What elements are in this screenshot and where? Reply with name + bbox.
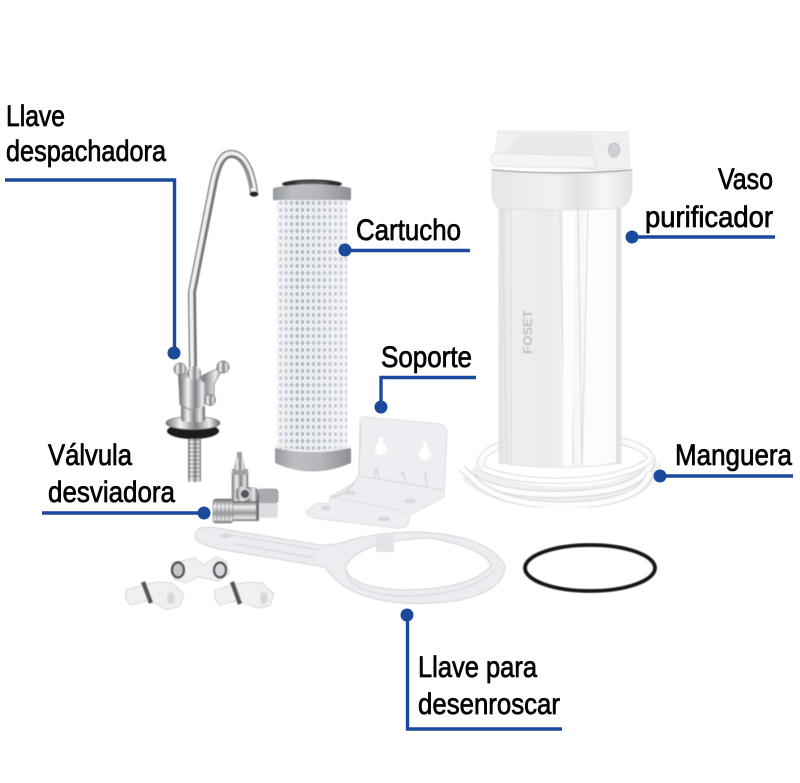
label: llave despachadora (5, 100, 180, 360)
label: valvula desviadora (42, 439, 210, 520)
brand mark: FOSET (520, 310, 535, 354)
label: valvula desviadora: desviadora (48, 476, 175, 509)
label: vaso purificador: purificador (645, 201, 773, 234)
vessel: vaso purificador (491, 131, 632, 468)
label: cartucho: Cartucho (356, 214, 461, 247)
hose coil, front (462, 458, 652, 505)
elbow fittings (126, 557, 274, 610)
label: cartucho (338, 214, 470, 256)
o-ring (525, 545, 655, 591)
faucet: llave despachadora (166, 154, 258, 482)
label: llave despachadora: despachadora (6, 135, 166, 168)
label: llave para desenroscar (400, 608, 562, 729)
cartridge filter (273, 180, 351, 472)
label: llave despachadora: Llave (6, 100, 65, 133)
label: llave para desenroscar: desenroscar (418, 688, 560, 721)
wrench: llave para desenroscar (195, 527, 505, 604)
bracket: soporte (306, 417, 447, 528)
label: soporte: Soporte (381, 341, 472, 374)
label: vaso purificador (626, 163, 775, 244)
hose coil, back (480, 437, 651, 468)
label: soporte (374, 341, 476, 414)
label: vaso purificador: Vaso (718, 163, 773, 196)
valve: valvula desviadora (213, 452, 278, 523)
label: llave para desenroscar: Llave para (418, 651, 537, 684)
label: manguera (654, 439, 793, 482)
label: valvula desviadora: Válvula (48, 439, 132, 472)
